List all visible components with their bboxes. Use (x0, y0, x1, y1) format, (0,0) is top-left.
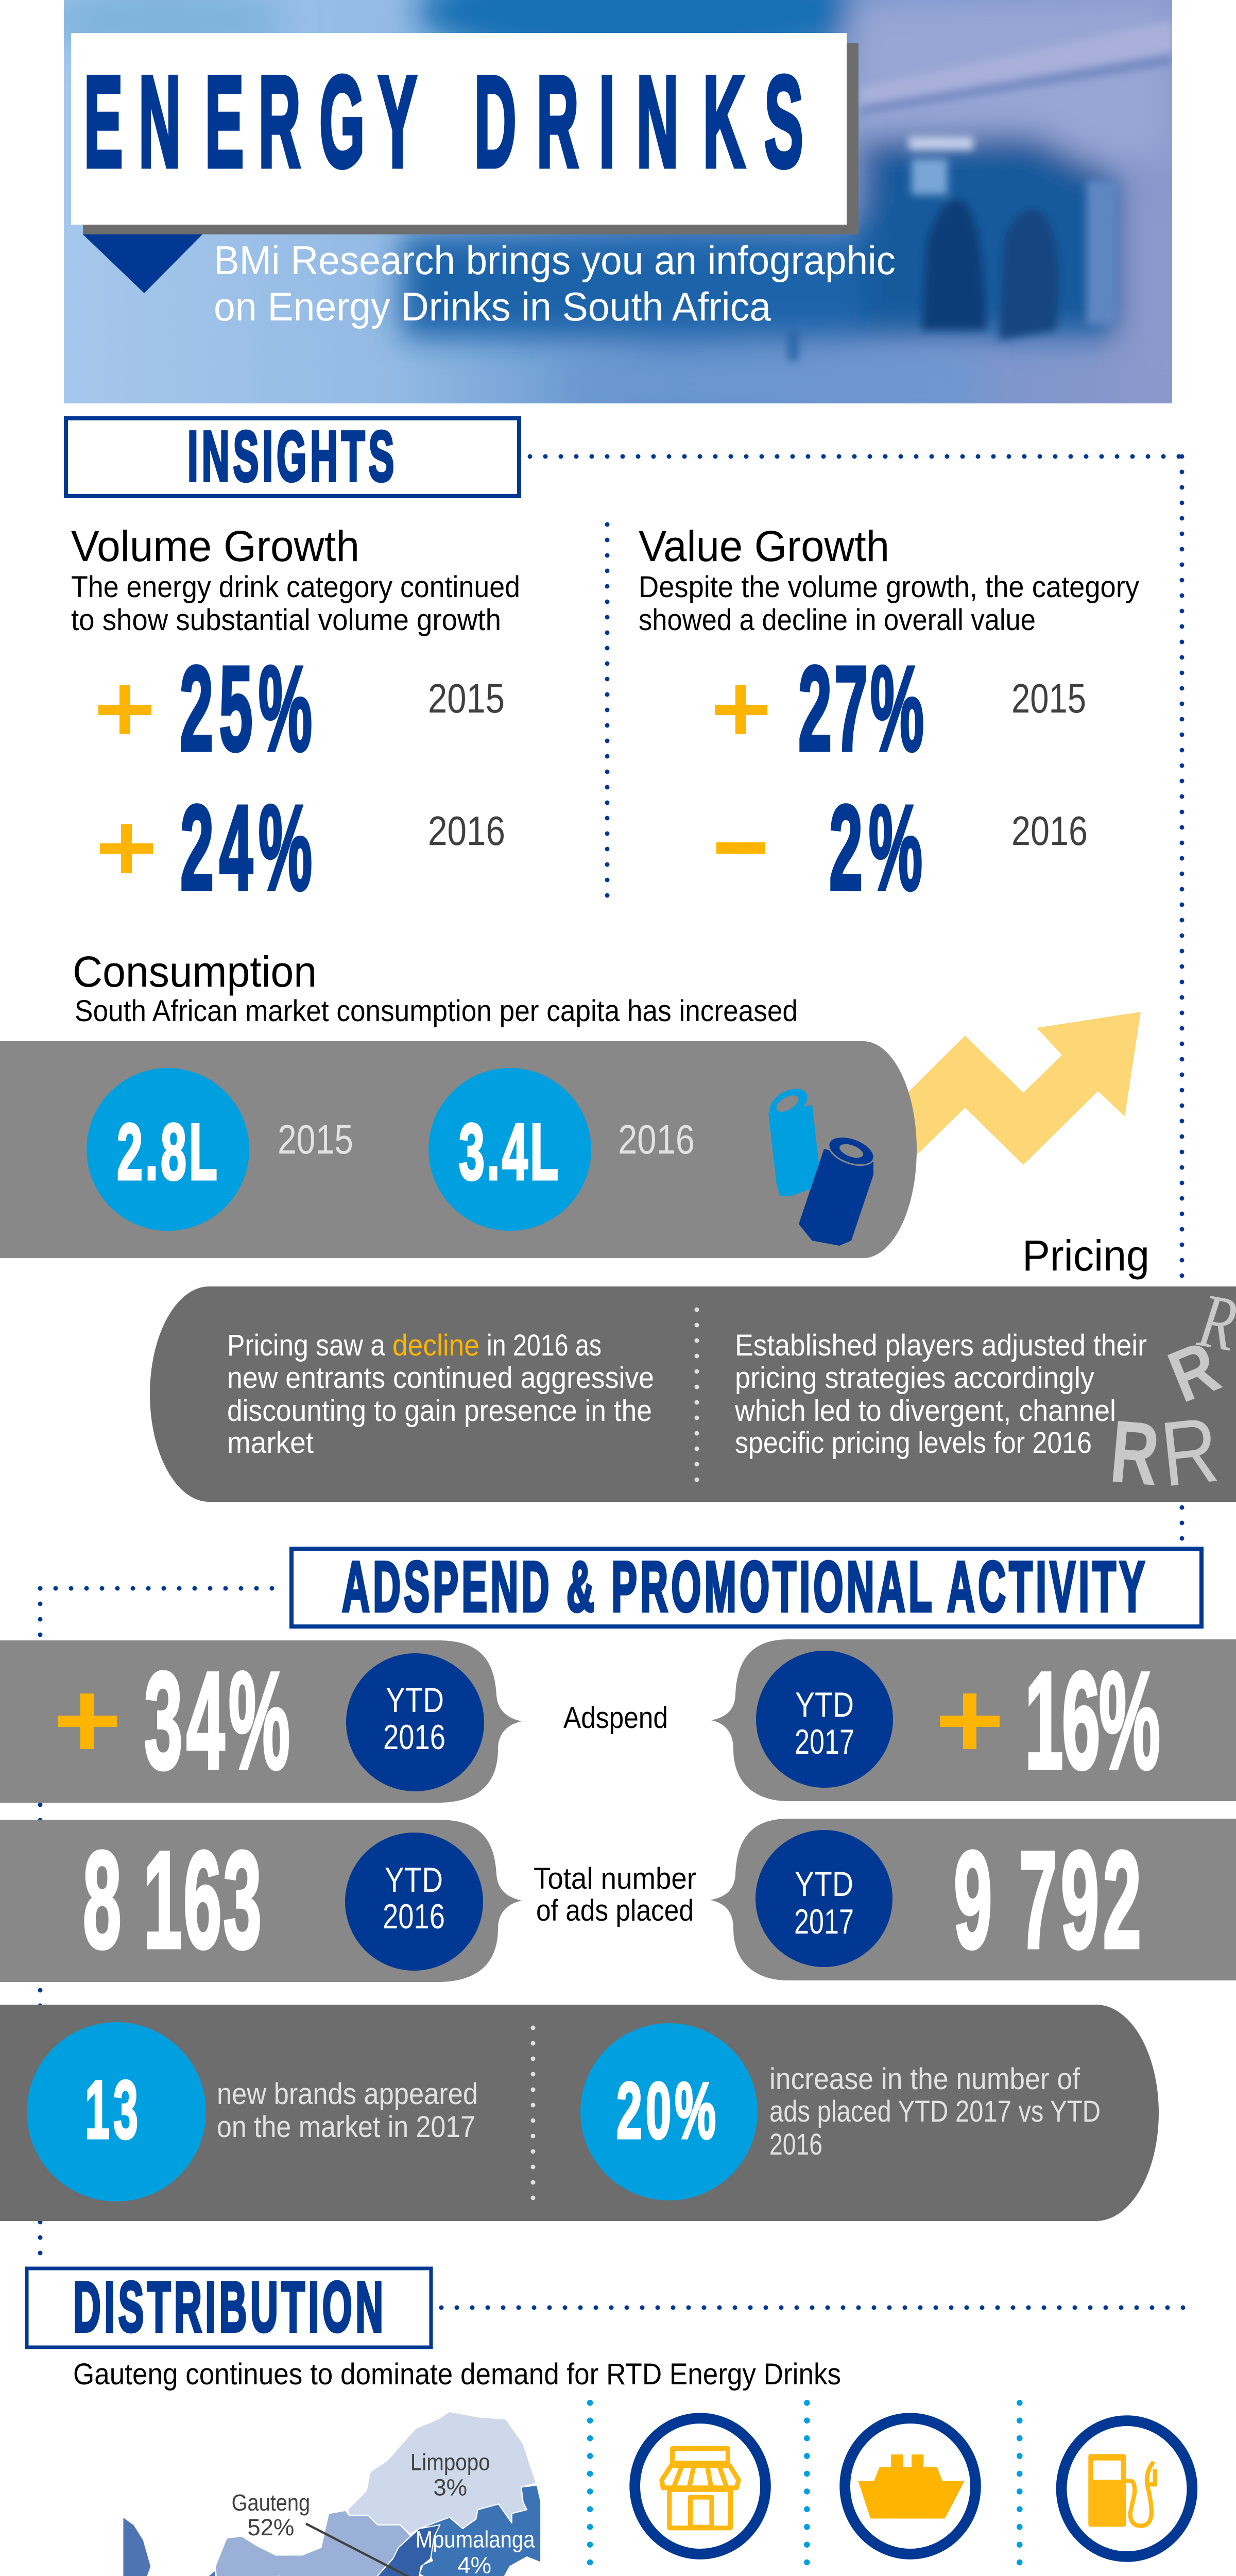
title shadow (83, 43, 859, 234)
pricing text right: which led to divergent, channel (734, 1394, 1116, 1428)
stat 2016: 2016 (618, 1116, 695, 1162)
value: 9 792 (954, 1822, 1141, 1977)
stat 2015 (98, 642, 505, 776)
pointer triangle (83, 234, 202, 293)
panel: consumption (0, 1041, 917, 1258)
icon: rand symbols (1107, 1277, 1236, 1506)
hero background photo (41, 0, 1174, 407)
icon: rand symbols: R (1107, 1402, 1163, 1504)
stat 2016 (428, 1068, 695, 1231)
stat 2015: 2015 (428, 675, 505, 721)
panel: new brands and ads increase (0, 2005, 1159, 2221)
pricing text left: market (227, 1426, 314, 1460)
section connector dots (40, 456, 1187, 2308)
label: total number of ads placed: of ads placed (536, 1894, 694, 1927)
stat: new brands (27, 2022, 478, 2201)
panel: pricing (150, 1277, 1236, 1506)
value: 16% (1025, 1643, 1160, 1798)
description (71, 570, 520, 637)
description: to show substantial volume growth (71, 603, 501, 637)
heading: Volume Growth (71, 522, 359, 570)
map labels: Gauteng (232, 2489, 310, 2516)
map labels (73, 2449, 531, 2576)
period badge: YTD (795, 1865, 853, 1904)
stat: new brands: 13 (85, 2064, 138, 2156)
pricing text left: discounting to gain presence in the (227, 1394, 652, 1428)
icon: rand symbols: R (1158, 1325, 1230, 1418)
description (639, 570, 1139, 637)
pricing text right (734, 1329, 1147, 1460)
channel: export (845, 2418, 975, 2576)
hero subtitle (214, 238, 896, 329)
province: Gauteng (374, 2525, 440, 2576)
panel: channel grid (587, 2403, 1220, 2576)
title: ENERGY DRINKS (84, 49, 803, 194)
panel: adspend 2017 (711, 1639, 1236, 1801)
pricing text left (227, 1329, 654, 1460)
value: 34% (144, 1643, 290, 1798)
pricing text right: pricing strategies accordingly (735, 1361, 1094, 1395)
stat: ads placed increase: ads placed YTD 2017 vs YTD (769, 2095, 1101, 2128)
stat 2015 (715, 642, 1086, 776)
value: 8 163 (83, 1822, 262, 1977)
heading: Value Growth (639, 522, 889, 570)
panel: volume growth (71, 522, 520, 916)
icon: fuel pump (1088, 2454, 1155, 2527)
stat 2015: 2015 (278, 1116, 353, 1162)
label: adspend: Adspend (563, 1701, 668, 1735)
channel: forecourts (1061, 2421, 1192, 2576)
province: North West (215, 2511, 411, 2576)
period badge: YTD (386, 1681, 444, 1720)
stat: new brands: new brands appeared (217, 2077, 478, 2111)
pricing text left: new entrants continued aggressive (227, 1361, 654, 1395)
pricing text right: specific pricing levels for 2016 (735, 1426, 1092, 1460)
hero subtitle: on Energy Drinks in South Africa (214, 284, 771, 329)
label: total number of ads placed (534, 1862, 696, 1927)
stat 2015 (87, 1068, 353, 1231)
pricing text left: decline (392, 1329, 479, 1362)
distribution subtitle: Gauteng continues to dominate demand for RTD Energy Drinks (73, 2358, 841, 2391)
plus sign (940, 1693, 1000, 1749)
map of South Africa: Mpumalanga (416, 2527, 535, 2553)
label: total number of ads placed: Total number (534, 1862, 696, 1895)
gauteng leader line (306, 2523, 409, 2576)
period badge: 2017 (794, 1902, 854, 1941)
arrow: rising trend (896, 1012, 1141, 1175)
icon: rand symbols: R (1156, 1398, 1223, 1506)
plus sign (58, 1693, 117, 1749)
stat 2015: 27% (798, 642, 924, 776)
period badge: 2016 (383, 1897, 445, 1936)
period badge: YTD (385, 1860, 443, 1900)
stat: ads placed increase: 2016 (769, 2128, 822, 2161)
pricing text left: Pricing saw a (227, 1329, 386, 1362)
stat 2016: 2016 (428, 808, 505, 854)
heading: insights (66, 417, 519, 496)
province: Mpumalanga (414, 2485, 541, 2576)
period badge (345, 1833, 483, 1971)
heading: consumption: Consumption (73, 947, 317, 996)
province: Northern Cape (2, 2517, 315, 2576)
panel: adspend 2016 (0, 1640, 522, 1803)
stat 2016: 24% (180, 781, 312, 916)
period badge (756, 1651, 893, 1788)
icon: drink cans (764, 1082, 878, 1246)
province: Limpopo (348, 2412, 536, 2534)
stat 2015: 2.8L (117, 1107, 217, 1196)
stat 2016 (716, 781, 1088, 916)
stat 2016: 2% (829, 781, 922, 916)
panel: value growth (639, 522, 1139, 916)
heading: pricing: Pricing (1022, 1231, 1149, 1280)
description: The energy drink category continued (71, 570, 520, 604)
map of South Africa (2, 2412, 573, 2576)
pricing text right: Established players adjusted their (735, 1329, 1147, 1362)
stat: ads placed increase: 20% (616, 2065, 716, 2155)
stat 2015: 2015 (1011, 675, 1086, 721)
icon: ship (858, 2454, 965, 2519)
stat 2016: 3.4L (459, 1107, 558, 1196)
hero banner (41, 0, 1174, 407)
panel: ads placed 2017 (710, 1819, 1236, 1980)
channel: bottom end retail (628, 2418, 772, 2576)
icon: shop (662, 2449, 739, 2528)
period badge (346, 1653, 484, 1791)
panel: ads placed 2016 (0, 1820, 522, 1982)
heading: insights: INSIGHTS (187, 417, 394, 496)
period badge: 2016 (383, 1718, 445, 1757)
stat 2016 (100, 781, 505, 916)
period badge: 2017 (795, 1722, 854, 1761)
description: showed a decline in overall value (639, 603, 1036, 637)
pricing text left: in 2016 as (487, 1329, 602, 1362)
period badge: YTD (795, 1685, 854, 1724)
map labels: 52% (247, 2514, 294, 2540)
heading: consumption (73, 947, 798, 1028)
hero subtitle: BMi Research brings you an infographic (214, 238, 896, 283)
stat 2015: 25% (180, 642, 312, 776)
stat 2016: 2016 (1011, 808, 1088, 854)
heading: consumption: South African market consumption per capita has increased (75, 994, 798, 1028)
description: Despite the volume growth, the category (639, 570, 1139, 604)
stat: ads placed increase: increase in the number of (769, 2062, 1080, 2096)
title card (71, 33, 847, 225)
heading: adspend and promotional activity: ADSPEND & PROMOTIONAL ACTIVITY (342, 1548, 1145, 1626)
stat: new brands: on the market in 2017 (217, 2110, 475, 2144)
map labels: 3% (433, 2474, 467, 2500)
heading: distribution: DISTRIBUTION (73, 2268, 383, 2347)
map labels: Limpopo (410, 2449, 490, 2475)
stat: ads placed increase (580, 2023, 1101, 2200)
period badge (756, 1830, 892, 1967)
